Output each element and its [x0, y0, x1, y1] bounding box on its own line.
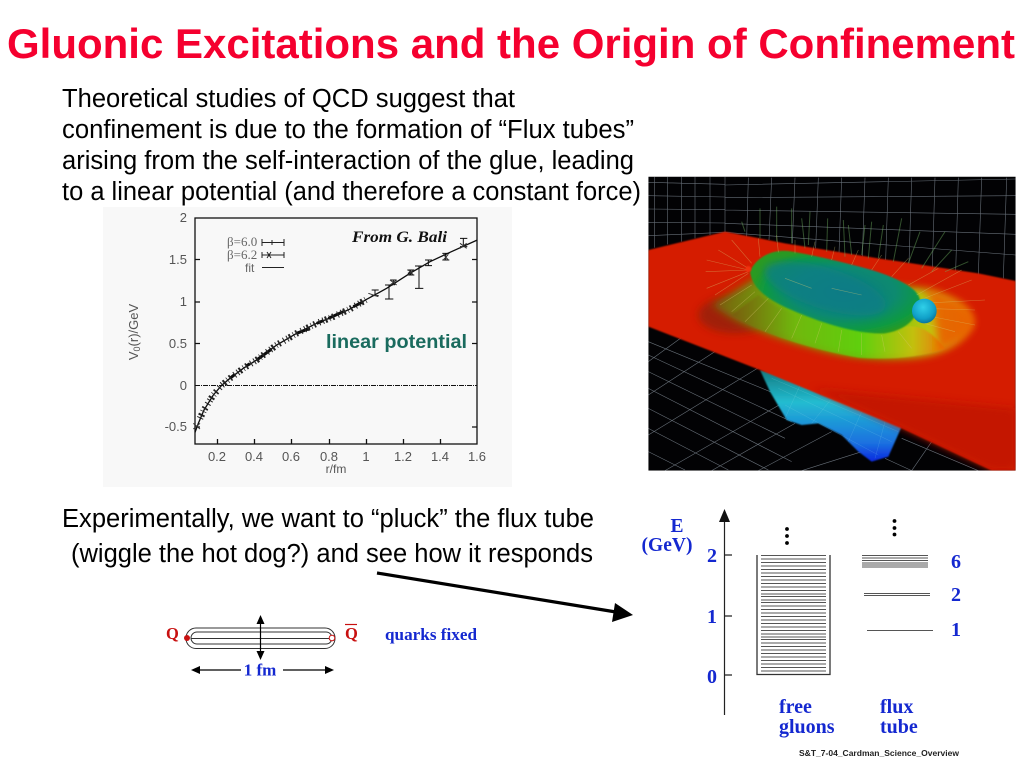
level counts: 1	[951, 619, 961, 641]
chart frame and ticks	[195, 218, 477, 444]
text block: theory of flux tubes: confinement is due to the formation of “Flux tubes”	[62, 116, 634, 144]
y axis labels: 0.5	[169, 336, 187, 351]
arrow: from text to spectrum	[377, 573, 633, 622]
column label: flux tube: tube	[880, 716, 918, 738]
y axis title: 0	[132, 346, 142, 351]
x axis labels: 1.6	[468, 449, 486, 464]
x axis labels: 0.2	[208, 449, 226, 464]
tube outlines	[186, 628, 335, 648]
underside of the sheet	[760, 370, 902, 462]
y axis labels: 0	[180, 378, 187, 393]
fitted curve and data points	[193, 238, 477, 432]
quark	[166, 624, 190, 643]
column label: free gluons: gluons	[779, 716, 835, 738]
attribution: From G. Bali	[351, 229, 448, 246]
column label: free gluons	[779, 696, 835, 738]
x axis labels: 0.4	[245, 449, 263, 464]
antiquark: Q	[345, 624, 358, 643]
x axis title: r/fm	[326, 462, 346, 476]
text block: theory of flux tubes: to a linear potential (and therefore a constant force)	[62, 178, 641, 206]
x axis labels	[208, 449, 486, 464]
y axis labels: -0.5	[165, 419, 187, 434]
diagram: flux tube between fixed quarks	[166, 615, 477, 680]
panel: potential chart	[103, 207, 512, 487]
legend	[227, 234, 284, 275]
arrow: vertical plucking	[256, 615, 264, 660]
red sheet	[648, 232, 1016, 471]
antiquark	[329, 624, 358, 643]
axis title	[642, 516, 692, 556]
x axis labels: 0.6	[282, 449, 300, 464]
quark sphere	[912, 299, 937, 323]
curve label: linear potential	[326, 332, 467, 353]
flux tube well	[750, 251, 920, 333]
energy axis	[719, 509, 732, 715]
text block: theory of flux tubes	[62, 85, 641, 206]
axis title: E	[670, 516, 684, 537]
column label: flux tube	[880, 696, 918, 738]
x axis labels: 0.8	[320, 449, 338, 464]
y axis title: (r)/GeV	[126, 304, 141, 346]
y axis labels	[165, 210, 187, 434]
force field arrows: radiating	[706, 235, 985, 355]
axis title: (GeV)	[642, 535, 692, 556]
charge spot	[745, 266, 751, 272]
axis numbers: 2	[707, 545, 717, 567]
length label: 1 fm	[244, 660, 276, 680]
x axis labels: 1.4	[431, 449, 449, 464]
image: 3D flux tube simulation	[648, 177, 1016, 471]
x axis labels: 1.2	[394, 449, 412, 464]
column label: free gluons: free	[779, 696, 812, 718]
y axis labels: 2	[180, 210, 187, 225]
continuation dots: flux tube	[893, 519, 896, 536]
zero line	[195, 384, 477, 386]
quark: Q	[166, 624, 179, 643]
force field arrows: back	[742, 207, 968, 272]
legend: β=6.2	[227, 247, 257, 262]
axis numbers: 0	[707, 666, 717, 688]
text block: pluck the flux tube	[62, 505, 594, 568]
legend: β=6.0	[227, 234, 257, 249]
level counts: 2	[951, 584, 961, 606]
chart: energy spectrum	[642, 509, 961, 738]
level counts: 6	[951, 551, 961, 573]
continuation dots: free gluons	[785, 527, 789, 545]
quarks fixed label: quarks fixed	[385, 625, 477, 644]
text block: pluck the flux tube: Experimentally, we want to “pluck” the flux tube	[62, 505, 594, 533]
text block: theory of flux tubes: arising from the self-interaction of the glue, leading	[62, 147, 634, 175]
x axis labels: 1	[362, 449, 370, 464]
level counts	[951, 551, 961, 641]
free gluons continuum	[757, 555, 830, 674]
arrow: tube length	[191, 666, 334, 674]
flux tube levels	[862, 556, 933, 630]
title: Gluonic Excitations and the Origin of Confinement	[7, 20, 1015, 67]
raised lip of the well	[712, 278, 973, 358]
text block: theory of flux tubes: Theoretical studies of QCD suggest that	[62, 85, 515, 113]
wall and floor grid	[648, 177, 1016, 471]
column label: flux tube: flux	[880, 696, 913, 718]
axis numbers	[707, 545, 717, 688]
text block: pluck the flux tube: (wiggle the hot dog?) and see how it responds	[71, 540, 593, 568]
y axis title: V	[126, 351, 141, 360]
axis numbers: 1	[707, 606, 717, 628]
footer reference: S&T_7-04_Cardman_Science_Overview	[799, 748, 959, 758]
legend: fit	[245, 261, 255, 275]
y axis labels: 1	[180, 294, 187, 309]
y axis labels: 1.5	[169, 252, 187, 267]
